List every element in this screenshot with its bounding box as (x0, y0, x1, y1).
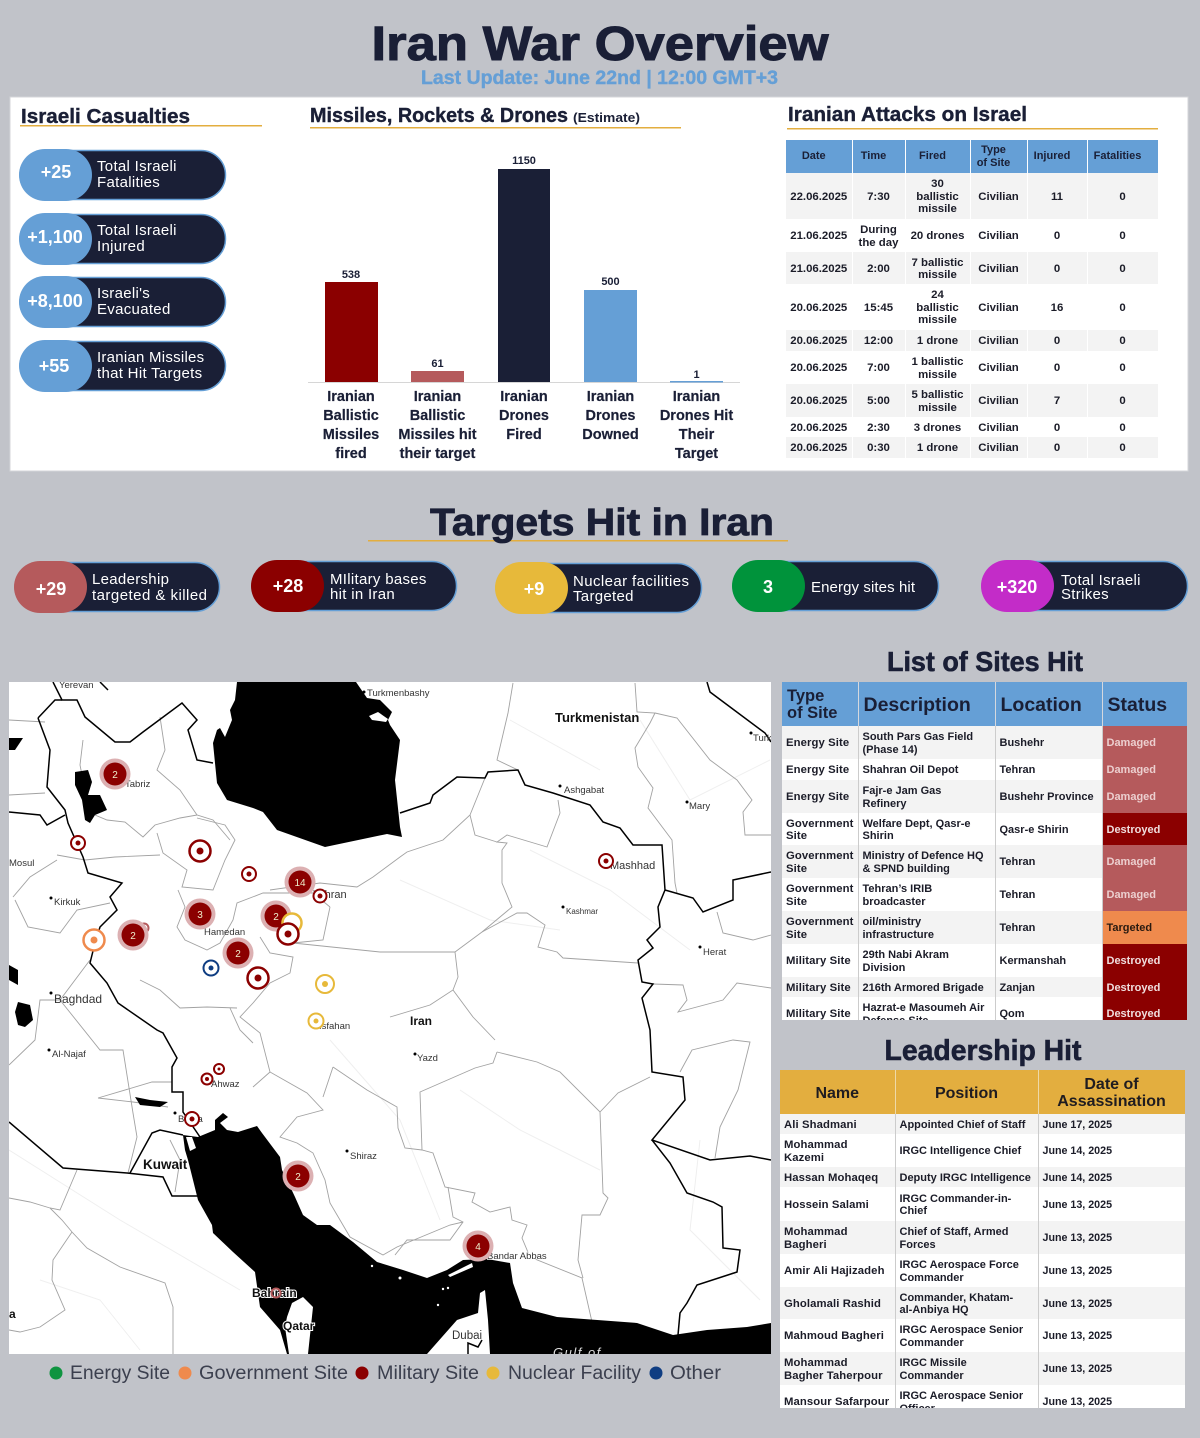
stat pill: leadership: Leadership (92, 571, 169, 588)
table: Iranian attacks on Israel: 20.06.2025 (790, 395, 847, 407)
table: Iranian attacks on Israel: 20.06.2025 (790, 335, 847, 347)
table: leadership hit: Commander (900, 1272, 964, 1284)
bar: drones fired: Fired (506, 427, 542, 443)
bar: drones hit target: Target (675, 446, 718, 462)
bar: ballistic missiles fired: fired (335, 446, 367, 462)
table: list of sites hit: South Pars Gas Field (862, 731, 973, 743)
stat pill: israeli strikes (981, 560, 1188, 612)
bar: ballistic missiles fired: Ballistic (323, 408, 379, 424)
table: leadership hit: Mahmoud Bagheri (784, 1330, 884, 1342)
table: list of sites hit: Shahran Oil Depot (862, 764, 958, 776)
bar: drones fired (498, 155, 550, 443)
bar: drones fired: 1150 (512, 155, 536, 167)
table: Iranian attacks on Israel: 0 (1119, 302, 1126, 314)
map labels: Tabriz (125, 779, 151, 790)
table: list of sites hit: 29th Nabi Akram (862, 949, 949, 961)
table: list of sites hit: Bushehr Province (1000, 791, 1094, 803)
bar: drones fired: Drones (499, 408, 549, 424)
table: Iranian attacks on Israel: 12:00 (864, 335, 893, 347)
table: list of sites hit: Destroyed (1106, 1008, 1160, 1020)
table: Iranian attacks on Israel: missile (918, 368, 957, 380)
table: list of sites hit: Tehran (1000, 922, 1035, 934)
bar: drones hit target: 1 (693, 369, 700, 381)
table: Iranian attacks on Israel: ballistic (916, 191, 959, 203)
bar: drones downed: Downed (582, 427, 639, 443)
stat pill: missiles hit (19, 340, 226, 392)
table: list of sites hit: Ministry of Defence HQ (862, 850, 984, 862)
table: Iranian attacks on Israel: missile (918, 314, 957, 326)
table: list of sites hit: Damaged (1106, 889, 1156, 901)
map labels: Bandar Abbas (487, 1251, 547, 1262)
table: leadership hit: Bagher Taherpour (784, 1370, 883, 1382)
bar: drones downed: Iranian (587, 389, 634, 405)
table: list of sites hit: Military Site (786, 955, 851, 967)
map labels: Basra (178, 1114, 204, 1125)
heading: Missiles, Rockets & Drones (310, 104, 681, 128)
table: Iranian attacks on Israel: Civilian (978, 191, 1019, 203)
table: leadership hit: June 13, 2025 (1042, 1199, 1112, 1211)
stat pill: fatalities: Total Israeli (97, 158, 177, 175)
bar: drones hit target (660, 369, 733, 462)
cluster markers: 4 (475, 1242, 481, 1253)
table: list of sites hit: Zanjan (1000, 982, 1035, 994)
map labels: Kuwait (143, 1157, 188, 1172)
table: list of sites hit: Description (864, 694, 971, 716)
table: list of sites hit: Type (787, 687, 824, 705)
table: list of sites hit: Government (786, 818, 854, 830)
table: Iranian attacks on Israel: 7:00 (867, 362, 890, 374)
table: Iranian attacks on Israel: 0 (1054, 263, 1060, 275)
bar: missiles hit target: Iranian (414, 389, 461, 405)
table: Iranian attacks on Israel: 0 (1054, 335, 1060, 347)
table: list of sites hit: Tehran’s IRIB (862, 883, 932, 895)
heading: Leadership Hit: Leadership Hit (884, 1035, 1082, 1067)
table: leadership hit: Mohammad (784, 1226, 848, 1238)
table: leadership hit: Chief (900, 1205, 927, 1217)
table: leadership hit: Gholamali Rashid (784, 1298, 881, 1310)
table: list of sites hit: Qom (1000, 1008, 1025, 1020)
table: Iranian attacks on Israel: 0 (1054, 422, 1060, 434)
map labels: Mosul (9, 858, 34, 869)
stat pill: energy sites: 3 (763, 577, 773, 597)
table: Iranian attacks on Israel: 20 drones (911, 230, 964, 242)
stat pill: military bases: +28 (273, 576, 303, 596)
heading: List of Sites Hit: List of Sites Hit (887, 646, 1083, 677)
stat pill: leadership (14, 561, 220, 613)
table: Iranian attacks on Israel: 2:00 (867, 263, 890, 275)
table: Iranian attacks on Israel: During (860, 224, 897, 236)
stat pill: evacuated: Evacuated (97, 301, 171, 318)
table: leadership hit: Commander (900, 1336, 964, 1348)
map labels: Baghdad (54, 992, 102, 1006)
table: leadership hit: Bagheri (784, 1238, 827, 1250)
map labels: Iran (410, 1014, 432, 1028)
map labels: Bahrain (252, 1286, 297, 1300)
table: list of sites hit: Energy Site (786, 791, 849, 803)
table: list of sites hit (782, 682, 1187, 1020)
stat pill: military bases: hit in Iran (330, 586, 395, 603)
stat pill: military bases: MIlitary bases (330, 571, 427, 588)
table: leadership hit: IRGC Intelligence Chief (900, 1145, 1021, 1157)
bar: drones downed: 500 (601, 276, 620, 288)
table: list of sites hit: Location (1000, 694, 1082, 716)
table: list of sites hit: Welfare Dept, Qasr-e (862, 818, 971, 830)
table: leadership hit: IRGC Commander-in- (900, 1193, 1011, 1205)
map labels: Yerevan (59, 680, 94, 691)
table: leadership hit: Mansour Safarpour (784, 1396, 889, 1408)
legend: military site: Military Site (377, 1363, 479, 1384)
table: leadership hit: Chief of Staff, Armed (900, 1226, 1008, 1238)
bar: missiles hit target: Missiles hit (398, 427, 477, 443)
table: Iranian attacks on Israel: 20.06.2025 (790, 442, 847, 454)
stat pill: energy sites: Energy sites hit (811, 579, 916, 596)
table: list of sites hit: Destroyed (1106, 824, 1160, 836)
bar: missiles hit target (398, 358, 477, 462)
map labels: Al-Najaf (52, 1049, 86, 1060)
table: list of sites hit: oil/ministry (862, 916, 921, 928)
table: Iranian attacks on Israel: 30 (931, 178, 944, 190)
bar: ballistic missiles fired (323, 269, 379, 462)
table: Iranian attacks on Israel: missile (918, 269, 957, 281)
cluster markers: 2 (235, 949, 241, 960)
stat pill: nuclear facilities: Targeted (573, 588, 634, 605)
table: Iranian attacks on Israel: 0 (1054, 362, 1060, 374)
table: Iranian attacks on Israel: missile (918, 203, 957, 215)
map labels: Turk (753, 733, 772, 744)
table: list of sites hit: Government (786, 883, 854, 895)
cluster markers: 2 (130, 931, 136, 942)
table: leadership hit: June 13, 2025 (1042, 1330, 1112, 1342)
table: list of sites hit: Destroyed (1106, 982, 1160, 994)
stat pill: missiles hit: +55 (39, 356, 69, 376)
table: list of sites hit: of Site (787, 704, 837, 722)
map labels: Mashhad (610, 860, 655, 872)
table: leadership hit: Forces (900, 1238, 936, 1250)
table: Iranian attacks on Israel: Time (861, 150, 886, 162)
table: Iranian attacks on Israel: 0 (1119, 191, 1126, 203)
stat pill: evacuated (19, 276, 226, 328)
table: list of sites hit: Damaged (1106, 737, 1156, 749)
table: leadership hit: Hassan Mohaqeq (784, 1172, 878, 1184)
table: Iranian attacks on Israel: 7:30 (867, 191, 890, 203)
table: list of sites hit: (Phase 14) (862, 744, 918, 756)
table: leadership hit: June 17, 2025 (1042, 1119, 1112, 1131)
table: Iranian attacks on Israel: 2:30 (867, 422, 890, 434)
table: Iranian attacks on Israel: 24 (931, 289, 944, 301)
cluster markers (100, 758, 494, 1262)
table: leadership hit: Appointed Chief of Staff (900, 1119, 1025, 1131)
table: Iranian attacks on Israel: 1 drone (917, 335, 958, 347)
legend: other: Other (670, 1363, 722, 1384)
heading: Israeli Casualties: Israeli Casualties (21, 106, 190, 128)
table: list of sites hit: Shirin (862, 830, 894, 842)
table: Iranian attacks on Israel: 11 (1051, 191, 1063, 203)
lakes (9, 738, 168, 1107)
bar: drones hit target: Iranian (673, 389, 720, 405)
map legend (50, 1363, 722, 1384)
map labels (9, 680, 772, 1360)
table: Iranian attacks on Israel: Civilian (978, 362, 1019, 374)
cluster markers: 2 (273, 912, 279, 923)
stat pill: israeli strikes: Total Israeli (1061, 572, 1141, 589)
table: list of sites hit: 216th Armored Brigade (862, 982, 984, 994)
table: Iranian attacks on Israel: 20.06.2025 (790, 302, 847, 314)
table: leadership hit: IRGC Aerospace Force (900, 1259, 1019, 1271)
table: Iranian attacks on Israel: Civilian (978, 230, 1019, 242)
map labels: Kirkuk (54, 897, 81, 908)
strike markers (71, 758, 613, 1298)
stat pill: israeli strikes: Strikes (1061, 586, 1109, 603)
table: leadership hit: IRGC Missile (900, 1357, 967, 1369)
table: list of sites hit: Military Site (786, 1008, 851, 1020)
map labels: Ahwaz (211, 1079, 240, 1090)
cluster markers: 2 (112, 770, 118, 781)
map labels: Kashmar (566, 907, 598, 916)
table: leadership hit: Ali Shadmani (784, 1119, 857, 1131)
table: Iranian attacks on Israel: 20.06.2025 (790, 422, 847, 434)
bar: missiles hit target: Ballistic (410, 408, 465, 424)
map labels: Turkmenistan (555, 710, 639, 725)
table: Iranian attacks on Israel: Fatalities (1094, 150, 1141, 162)
table: Iranian attacks on Israel: 0 (1119, 422, 1126, 434)
Caspian Sea (213, 682, 402, 847)
map labels: Tehran (313, 889, 347, 901)
table: leadership hit: IRGC Aerospace Senior (900, 1324, 1023, 1336)
table: Iranian attacks on Israel: 5:00 (867, 395, 890, 407)
stat pill: injured (19, 213, 226, 265)
table: leadership hit: Kazemi (784, 1152, 824, 1164)
table: Iranian attacks on Israel: Type (981, 144, 1006, 156)
stat pill: injured: Injured (97, 238, 145, 255)
table: list of sites hit: Damaged (1106, 791, 1156, 803)
table: Iranian attacks on Israel: 0:30 (867, 442, 890, 454)
stat pill: military bases (251, 560, 456, 612)
table: leadership hit: Commander (900, 1370, 964, 1382)
stat pill: leadership: +29 (36, 579, 66, 599)
stat pill: fatalities (19, 149, 226, 201)
map labels: Qatar (283, 1319, 315, 1333)
table: Iranian attacks on Israel: ballistic (916, 302, 959, 314)
table: Iranian attacks on Israel: Injured (1034, 150, 1070, 162)
table: list of sites hit: & SPND building (862, 862, 950, 874)
table: leadership hit: al-Anbiya HQ (900, 1304, 969, 1316)
table: leadership hit: June 14, 2025 (1042, 1145, 1112, 1157)
table: list of sites hit: Tehran (1000, 764, 1035, 776)
bar: ballistic missiles fired: 538 (342, 269, 360, 281)
table: list of sites hit: Status (1108, 694, 1167, 716)
table: leadership hit: Position (935, 1084, 998, 1102)
table: list of sites hit: Site (786, 862, 807, 874)
legend: government site: Government Site (199, 1363, 348, 1384)
stat pill: fatalities: Fatalities (97, 174, 160, 191)
bar: drones fired: Iranian (500, 389, 548, 405)
table: list of sites hit: Refinery (862, 798, 907, 810)
table: Iranian attacks on Israel: Civilian (978, 302, 1019, 314)
map labels: Yazd (417, 1053, 438, 1064)
bar: drones downed (582, 276, 639, 443)
heading: Missiles, Rockets & Drones: Missiles, Rockets & Drones (310, 104, 568, 127)
table: list of sites hit: Damaged (1106, 764, 1156, 776)
table: leadership hit: June 13, 2025 (1042, 1363, 1112, 1375)
table: list of sites hit: Bushehr (1000, 737, 1044, 749)
table: Iranian attacks on Israel (786, 140, 1158, 458)
panel: top summary (10, 97, 1188, 471)
table: list of sites hit: Military Site (786, 982, 851, 994)
table: list of sites hit: Site (786, 928, 807, 940)
table: leadership hit: Mohammad (784, 1139, 848, 1151)
bar chart (308, 155, 740, 462)
table: list of sites hit: Destroyed (1106, 955, 1160, 967)
bar: missiles hit target: their target (400, 446, 476, 462)
table: Iranian attacks on Israel: 7 (1054, 395, 1060, 407)
table: leadership hit: Assassination (1057, 1093, 1166, 1110)
table: Iranian attacks on Israel: 16 (1051, 302, 1063, 314)
Persian Gulf and Gulf of Oman (183, 1113, 771, 1354)
table: list of sites hit: Government (786, 850, 854, 862)
table: Iranian attacks on Israel: 0 (1119, 442, 1126, 454)
table: list of sites hit: infrastructure (862, 928, 934, 940)
table: Iranian attacks on Israel: of Site (977, 156, 1010, 168)
bar: drones downed: Drones (586, 408, 635, 424)
stat pill: injured: Total Israeli (97, 222, 177, 239)
table: Iranian attacks on Israel: Fired (919, 150, 946, 162)
cluster markers: 14 (294, 878, 306, 889)
bar: drones hit target: Drones Hit (660, 408, 733, 424)
subtitle: last update: Last Update: June 22nd | 12:00 GMT+3 (421, 68, 778, 89)
stat pill: evacuated: Israeli's (97, 285, 150, 302)
map labels: Ashgabat (564, 785, 605, 796)
table: Iranian attacks on Israel: 0 (1054, 442, 1060, 454)
table: list of sites hit: Qasr-e Shirin (1000, 824, 1069, 836)
table: leadership hit: June 13, 2025 (1042, 1265, 1112, 1277)
table: Iranian attacks on Israel: 0 (1119, 230, 1126, 242)
table: list of sites hit: Damaged (1106, 856, 1156, 868)
ring markers (71, 836, 613, 1126)
table: Iranian attacks on Israel: 0 (1119, 263, 1126, 275)
table: leadership hit: June 14, 2025 (1042, 1172, 1112, 1184)
table: leadership hit: June 13, 2025 (1042, 1298, 1112, 1310)
table: list of sites hit: Division (862, 962, 905, 974)
title: Iran War Overview (372, 18, 829, 71)
table: Iranian attacks on Israel: 5 ballistic (912, 389, 963, 401)
table: Iranian attacks on Israel: Civilian (978, 422, 1019, 434)
bar: ballistic missiles fired: Iranian (327, 389, 375, 405)
legend: nuclear facility: Nuclear Facility (508, 1363, 642, 1384)
heading: Targets Hit in Iran: Targets Hit in Iran (430, 502, 774, 544)
table: Iranian attacks on Israel: 7 ballistic (912, 257, 963, 269)
table: leadership hit (780, 1070, 1185, 1408)
stat pill: injured: +1,100 (27, 227, 83, 247)
stat pill: nuclear facilities: Nuclear facilities (573, 573, 689, 590)
table: leadership hit: June 13, 2025 (1042, 1396, 1112, 1408)
table: list of sites hit: broadcaster (862, 896, 925, 908)
stat pill: nuclear facilities: +9 (524, 579, 544, 599)
table: Iranian attacks on Israel: 0 (1119, 335, 1126, 347)
stat pill: missiles hit: Iranian Missiles (97, 349, 204, 366)
stat pill: fatalities: +25 (41, 162, 71, 182)
bar: drones hit target: Their (679, 427, 715, 443)
table: leadership hit: Name (815, 1084, 859, 1102)
map of strikes (9, 680, 772, 1360)
stat pill: leadership: targeted & killed (92, 587, 207, 604)
map labels: Turkmenbashy (367, 688, 430, 699)
stat pill: israeli strikes: +320 (997, 577, 1037, 597)
table: leadership hit: Commander, Khatam- (900, 1292, 1013, 1304)
stat pill: evacuated: +8,100 (27, 291, 83, 311)
table: Iranian attacks on Israel: 21.06.2025 (790, 263, 847, 275)
table: Iranian attacks on Israel: Date (802, 150, 826, 162)
table: leadership hit: June 13, 2025 (1042, 1232, 1112, 1244)
legend: other (650, 1363, 722, 1384)
table: Iranian attacks on Israel: the day (859, 236, 898, 248)
map labels: a (9, 1307, 16, 1321)
table: list of sites hit: Tehran (1000, 856, 1035, 868)
table: Iranian attacks on Israel: Civilian (978, 395, 1019, 407)
map labels: Gulf of (553, 1345, 602, 1360)
table: list of sites hit: Targeted (1106, 922, 1152, 934)
heading: Missiles, Rockets & Drones: (Estimate) (573, 110, 640, 125)
stat pill: nuclear facilities (495, 562, 702, 614)
map labels: Shiraz (350, 1151, 377, 1162)
legend: energy site: Energy Site (70, 1363, 170, 1384)
table: leadership hit: IRGC Aerospace Senior (900, 1390, 1023, 1402)
table: Iranian attacks on Israel: 22.06.2025 (790, 191, 847, 203)
table: list of sites hit: Site (786, 830, 807, 842)
stat pill: missiles hit: that Hit Targets (97, 365, 202, 382)
map labels: Hamedan (204, 927, 245, 938)
table: list of sites hit: Kermanshah (1000, 955, 1066, 967)
map labels: Dubai (452, 1330, 482, 1342)
table: leadership hit: Deputy IRGC Intelligence (900, 1172, 1031, 1184)
table: list of sites hit: Hazrat-e Masoumeh Air (862, 1002, 984, 1014)
table: Iranian attacks on Israel: 20.06.2025 (790, 362, 847, 374)
table: Iranian attacks on Israel: Civilian (978, 263, 1019, 275)
table: list of sites hit: Site (786, 896, 807, 908)
cluster markers: 2 (295, 1172, 301, 1183)
table: Iranian attacks on Israel: Civilian (978, 442, 1019, 454)
table: list of sites hit: Energy Site (786, 764, 849, 776)
table: leadership hit: Date of (1084, 1076, 1139, 1093)
bar: ballistic missiles fired: Missiles (323, 427, 379, 443)
heading: Iranian Attacks on Israel: Iranian Attacks on Israel (788, 103, 1027, 126)
table: list of sites hit: Fajr-e Jam Gas (862, 785, 941, 797)
table: leadership hit: Amir Ali Hajizadeh (784, 1265, 885, 1277)
table: Iranian attacks on Israel: 0 (1119, 362, 1126, 374)
table: list of sites hit: Tehran (1000, 889, 1035, 901)
table: Iranian attacks on Israel: Civilian (978, 335, 1019, 347)
table: Iranian attacks on Israel: 1 drone (917, 442, 958, 454)
bar: missiles hit target: 61 (431, 358, 444, 370)
table: Iranian attacks on Israel: 1 ballistic (912, 356, 963, 368)
map labels: Isfahan (319, 1021, 350, 1032)
table: Iranian attacks on Israel: 0 (1119, 395, 1126, 407)
table: Iranian attacks on Israel: missile (918, 402, 957, 414)
map labels: Herat (703, 947, 727, 958)
cluster markers: 3 (197, 910, 203, 921)
table: leadership hit: Hossein Salami (784, 1199, 869, 1211)
table: list of sites hit: Government (786, 916, 854, 928)
stat pill: energy sites (732, 560, 938, 612)
table: leadership hit: Mohammad (784, 1357, 848, 1369)
table: Iranian attacks on Israel: 3 drones (914, 422, 961, 434)
map labels: Mary (689, 801, 710, 812)
table: Iranian attacks on Israel: 15:45 (864, 302, 893, 314)
table: Iranian attacks on Israel: 0 (1054, 230, 1060, 242)
table: Iranian attacks on Israel: 21.06.2025 (790, 230, 847, 242)
table: list of sites hit: Energy Site (786, 737, 849, 749)
